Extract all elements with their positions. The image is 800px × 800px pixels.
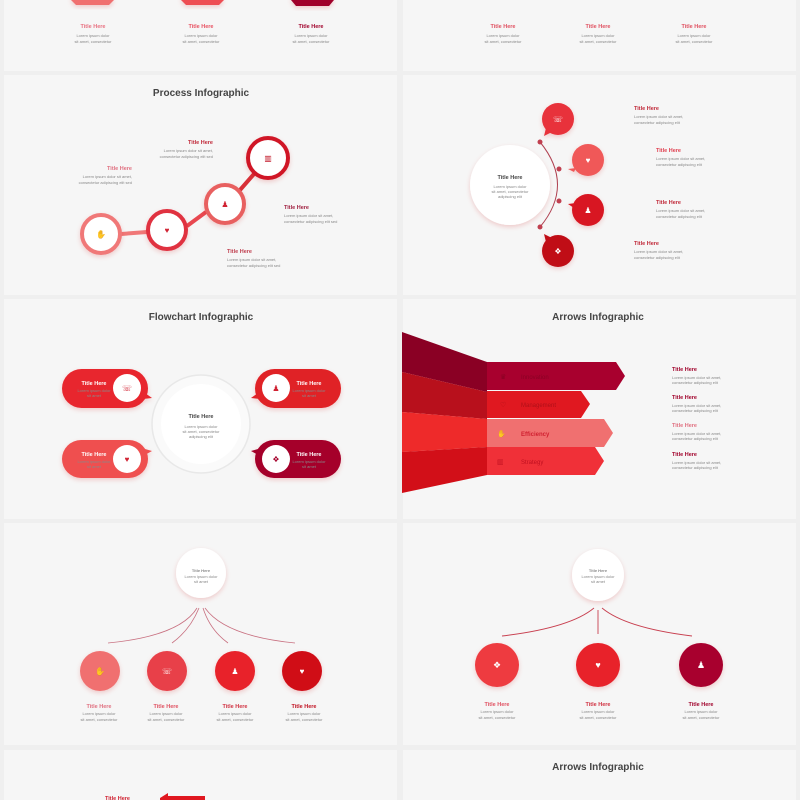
pill top-left: sit amet (87, 393, 102, 398)
center circle: Title Here (498, 175, 522, 181)
panel: tree 3: sit amet, consectetur (683, 715, 720, 720)
pill top-right: Title Here (297, 381, 321, 387)
panel: top-left partial: sit amet, consectetur (183, 39, 220, 44)
center circle: adipiscing elit (498, 194, 523, 199)
pill bottom-right: sit amet (302, 464, 317, 469)
panel: arrows infographic: consectetur adipiscing elit (672, 380, 719, 385)
arrow 2 (487, 391, 590, 418)
center circle (470, 145, 550, 225)
panel: tree 3: Lorem ipsum dolor (684, 709, 718, 714)
panel: tree 4: Title Here (292, 704, 316, 710)
pill bottom-right: Title Here (297, 452, 321, 458)
shape 2 (181, 0, 224, 5)
panel: flowchart (62, 312, 341, 478)
panel: top-left partial: Title Here (189, 24, 213, 30)
panel: arrows infographic: consectetur adipiscing elit (672, 465, 719, 470)
circle 2: ♥ (165, 226, 170, 235)
pill top-right: sit amet (302, 393, 317, 398)
panel: process infographic: consectetur adipiscing elit sed (227, 263, 280, 268)
center circle: Title Here (189, 414, 213, 420)
top circle: Lorem ipsum dolor (184, 574, 218, 579)
circle 4 (248, 138, 288, 178)
circle 1 (80, 651, 120, 691)
panel: radial process: Title Here (656, 200, 681, 206)
circle 2 (148, 211, 186, 249)
panel: radial process: Lorem ipsum dolor sit amet, (634, 249, 683, 254)
circle 4: ▥ (264, 154, 272, 163)
bubble 3: ♟ (584, 206, 592, 215)
bubble 1 (542, 103, 574, 136)
panel: radial process: Lorem ipsum dolor sit amet, (634, 114, 683, 119)
arrow 1: ♛ (500, 373, 506, 381)
circle 3 (206, 185, 244, 223)
top circle (176, 548, 226, 598)
connectors (121, 174, 254, 234)
circle 3 (679, 643, 723, 687)
panel: tree 4 (80, 548, 323, 722)
circle 1: ✋ (96, 229, 106, 239)
center circle: sit amet, consectetur (183, 429, 220, 434)
panel: arrows infographic (402, 312, 721, 493)
heading: Process Infographic (153, 88, 250, 99)
bubble 2 (568, 144, 604, 176)
pill bottom-left: sit amet (87, 464, 102, 469)
panel: arrows infographic: Lorem ipsum dolor sit amet, (672, 460, 721, 465)
circle 1 (475, 643, 519, 687)
pill bottom-right: ❖ (272, 455, 280, 464)
panel: process infographic: Lorem ipsum dolor sit amet, (83, 174, 132, 179)
fan (402, 332, 487, 493)
center circle: Lorem ipsum dolor (184, 424, 218, 429)
center circle: Lorem ipsum dolor (493, 184, 527, 189)
panel: bottom-right heading: Arrows Infographic (552, 762, 644, 773)
panel: top-right partial: Lorem ipsum dolor (677, 33, 711, 38)
panel: top-left partial: Lorem ipsum dolor (76, 33, 110, 38)
pill top-right: ♟ (272, 384, 280, 393)
panel: tree 4: sit amet, consectetur (286, 717, 323, 722)
panel: tree 4: Lorem ipsum dolor (218, 711, 252, 716)
panel: top-right partial: sit amet, consectetur (676, 39, 713, 44)
panel: process infographic (79, 88, 337, 268)
pill top-left (62, 369, 152, 408)
top circle: sit amet (194, 579, 209, 584)
panel: radial process: Lorem ipsum dolor sit amet, (656, 156, 705, 161)
bubble 4 (542, 234, 574, 267)
pill bottom-right (251, 440, 341, 478)
panel: arrows infographic: Title Here (672, 395, 697, 401)
pill top-right: Lorem ipsum dolor (292, 388, 326, 393)
top circle: Lorem ipsum dolor (581, 574, 615, 579)
panel: process infographic: Lorem ipsum dolor sit amet, (284, 213, 333, 218)
panel: process infographic: Title Here (227, 249, 252, 255)
pill bottom-left: ♥ (125, 455, 130, 464)
panel: tree 3: Title Here (586, 702, 610, 708)
panel: radial process: consectetur adipiscing elit (634, 255, 681, 260)
top circle: sit amet (591, 579, 606, 584)
bubble 3 (568, 194, 604, 226)
bubble 1: ☏ (553, 115, 563, 124)
circle 1: ✋ (95, 666, 105, 676)
top circle (572, 549, 624, 601)
panel: tree 4: Title Here (87, 704, 111, 710)
panel: bottom-left partial (105, 793, 205, 800)
panel: radial process: Title Here (634, 241, 659, 247)
circle 1 (82, 215, 120, 253)
heading: Arrows Infographic (552, 312, 644, 323)
panel: top-left partial (71, 0, 334, 44)
center circle: adipiscing elit (189, 434, 214, 439)
panel: top-right partial: Lorem ipsum dolor (581, 33, 615, 38)
panel: top-right partial: Title Here (586, 24, 610, 30)
panel: top-right partial: Lorem ipsum dolor (486, 33, 520, 38)
panel: top-right partial: Title Here (682, 24, 706, 30)
arc (540, 142, 558, 227)
panel: arrows infographic: consectetur adipiscing elit (672, 408, 719, 413)
panel: process infographic: consectetur adipiscing elit sed (284, 219, 337, 224)
panel: radial process (470, 103, 705, 267)
panel: radial process: consectetur adipiscing elit (634, 120, 681, 125)
panel: radial process: Title Here (634, 106, 659, 112)
pill top-right (251, 369, 341, 408)
arrow 3 (487, 419, 613, 447)
circle 3 (215, 651, 255, 691)
panel: process infographic: Title Here (284, 205, 309, 211)
panel: process infographic: Title Here (188, 140, 213, 146)
arrow 1: Innovation (521, 375, 549, 381)
panel: arrows infographic: Lorem ipsum dolor sit amet, (672, 375, 721, 380)
pill top-left: Title Here (82, 381, 106, 387)
panel: tree 3: sit amet, consectetur (580, 715, 617, 720)
arrow 4: ▥ (497, 459, 504, 466)
panel: arrows infographic: Title Here (672, 423, 697, 429)
pill bottom-left: Lorem ipsum dolor (77, 459, 111, 464)
panel: top-right partial: sit amet, consectetur (580, 39, 617, 44)
heading: Flowchart Infographic (149, 312, 254, 323)
circle 2: ☏ (162, 667, 172, 676)
circle 4: ♥ (300, 667, 305, 676)
circle 2: ♥ (595, 660, 601, 670)
panel: top-right partial (485, 24, 713, 44)
panel: top-right partial: sit amet, consectetur (485, 39, 522, 44)
panel: tree 4: Title Here (154, 704, 178, 710)
panel: tree 4: sit amet, consectetur (217, 717, 254, 722)
panel: tree 3 (475, 549, 723, 720)
circle 4 (282, 651, 322, 691)
circle 2 (576, 643, 620, 687)
shape 1 (71, 0, 114, 5)
panel: top-left partial: sit amet, consectetur (75, 39, 112, 44)
panel: radial process: consectetur adipiscing elit (656, 214, 703, 219)
arrow 2: Management (521, 403, 556, 409)
arrow (160, 793, 205, 800)
panel: tree 4: Lorem ipsum dolor (82, 711, 116, 716)
panel: process infographic: Title Here (107, 166, 132, 172)
panel: arrows infographic: Lorem ipsum dolor sit amet, (672, 431, 721, 436)
panel: process infographic: Lorem ipsum dolor sit amet, (164, 148, 213, 153)
arrow 3: ✋ (497, 429, 506, 438)
panel: radial process: consectetur adipiscing elit (656, 162, 703, 167)
circle 1: ❖ (493, 660, 501, 670)
top circle: Title Here (192, 568, 211, 573)
panel: top-left partial: Title Here (299, 24, 323, 30)
bubble 2: ♥ (586, 156, 591, 165)
panel: top-left partial: sit amet, consectetur (293, 39, 330, 44)
pill bottom-left: Title Here (82, 452, 106, 458)
connectors (502, 608, 692, 636)
panel: tree 3: Lorem ipsum dolor (581, 709, 615, 714)
panel: tree 3: Title Here (689, 702, 713, 708)
panel: process infographic: consectetur adipiscing elit sed (160, 154, 213, 159)
pill bottom-left (62, 440, 152, 478)
panel: top-left partial: Title Here (81, 24, 105, 30)
arrow 4 (487, 447, 604, 475)
arrow 1 (487, 362, 625, 390)
center circle: sit amet, consectetur (492, 189, 529, 194)
panel: radial process: Title Here (656, 148, 681, 154)
panel: arrows infographic: consectetur adipiscing elit (672, 436, 719, 441)
top circle: Title Here (589, 568, 608, 573)
panel: arrows infographic: Lorem ipsum dolor sit amet, (672, 403, 721, 408)
bubble 4: ❖ (554, 247, 562, 256)
pill top-left: ☏ (122, 384, 132, 393)
panel: tree 4: sit amet, consectetur (148, 717, 185, 722)
panel: tree 3: sit amet, consectetur (479, 715, 516, 720)
shape 3 (291, 0, 334, 6)
center circle (152, 375, 250, 473)
panel: tree 4: sit amet, consectetur (81, 717, 118, 722)
panel: top-left partial: Lorem ipsum dolor (294, 33, 328, 38)
circle 2 (147, 651, 187, 691)
arrow 3: Efficiency (521, 432, 550, 438)
panel: top-left partial: Lorem ipsum dolor (184, 33, 218, 38)
panel: tree 3: Title Here (485, 702, 509, 708)
panel: tree 3: Lorem ipsum dolor (480, 709, 514, 714)
connectors (108, 608, 295, 643)
circle 3: ♟ (221, 200, 229, 209)
panel: arrows infographic: Title Here (672, 452, 697, 458)
arrow 2: ♡ (500, 401, 506, 409)
panel: tree 4: Lorem ipsum dolor (149, 711, 183, 716)
panel: tree 4: Title Here (223, 704, 247, 710)
panel: process infographic: consectetur adipiscing elit sed (79, 180, 132, 185)
panel: process infographic: Lorem ipsum dolor sit amet, (227, 257, 276, 262)
circle 3: ♟ (231, 667, 239, 676)
circle 3: ♟ (697, 660, 705, 670)
pill bottom-right: Lorem ipsum dolor (292, 459, 326, 464)
arrow 4: Strategy (521, 460, 543, 466)
panel: tree 4: Lorem ipsum dolor (287, 711, 321, 716)
panel: top-right partial: Title Here (491, 24, 515, 30)
panel: radial process: Lorem ipsum dolor sit amet, (656, 208, 705, 213)
panel: arrows infographic: Title Here (672, 367, 697, 373)
pill top-left: Lorem ipsum dolor (77, 388, 111, 393)
